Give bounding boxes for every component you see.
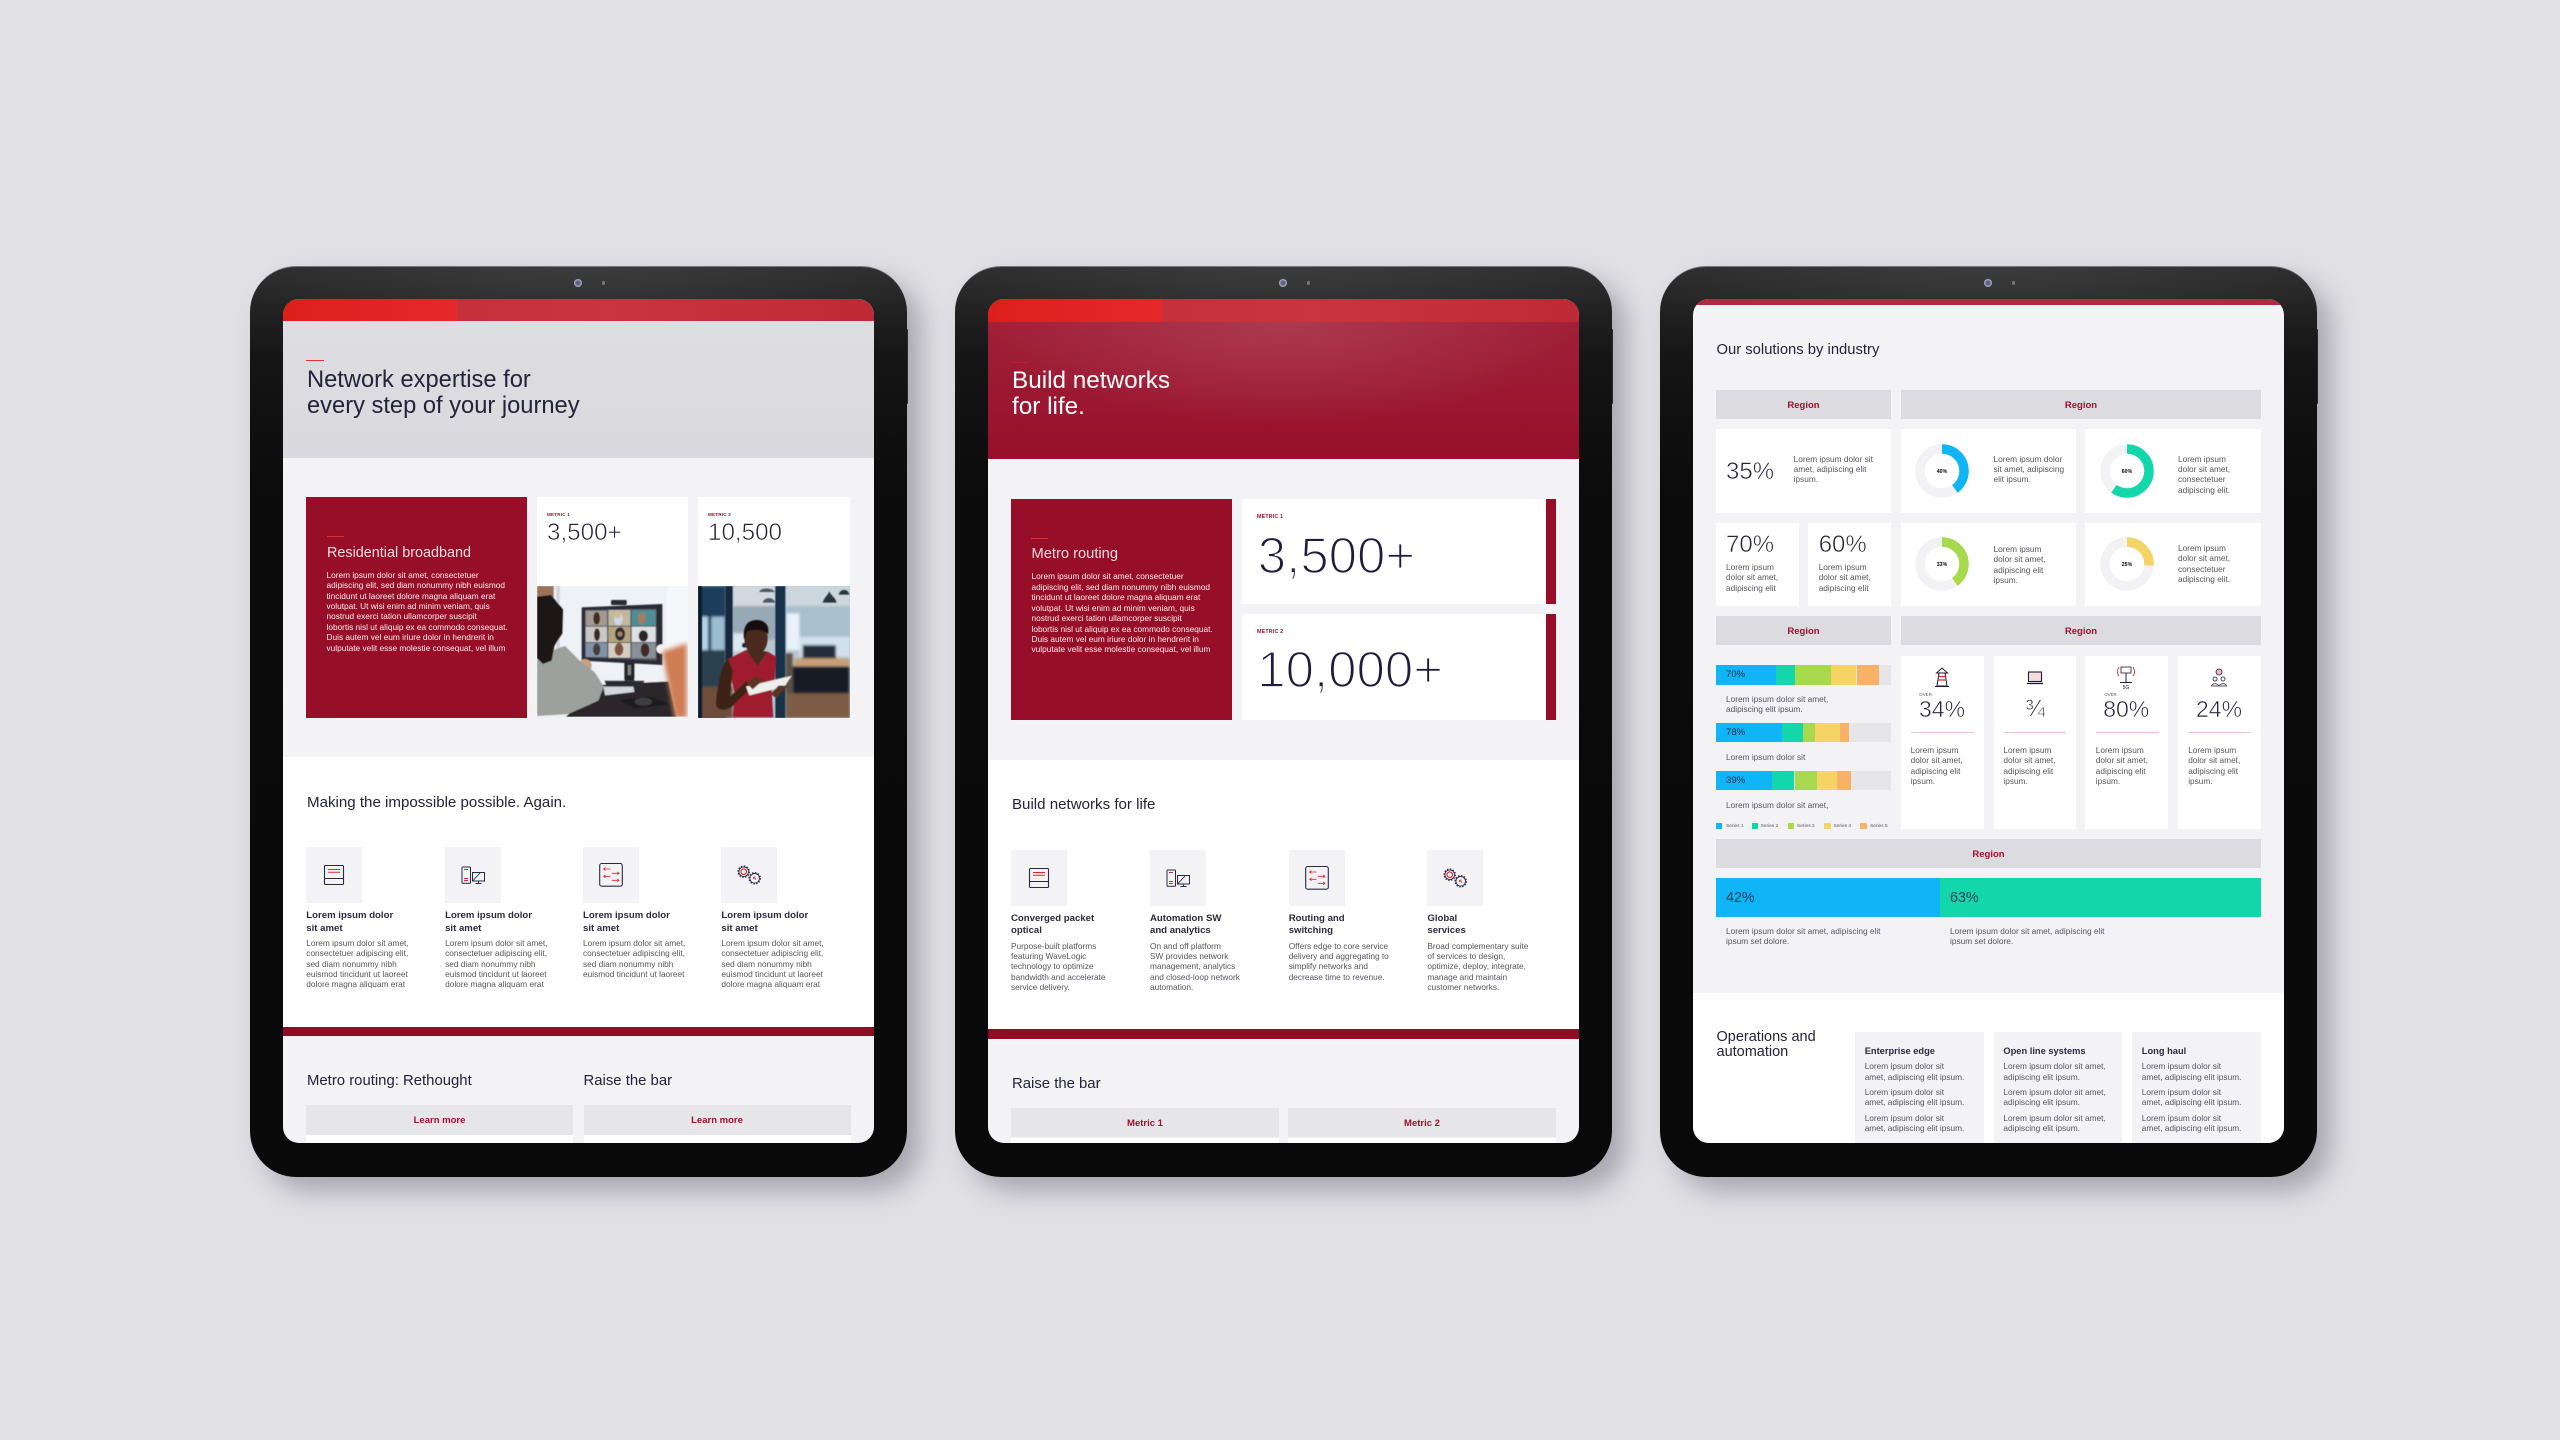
feature: routing: simplify networks and — [1289, 961, 1368, 971]
screen 1: dolore magna aliquam erat — [445, 979, 544, 989]
feature: automation: SW provides network — [1150, 951, 1228, 961]
feature: global services: services — [1427, 925, 1466, 936]
stat card 3/4: dolor sit amet, — [2003, 755, 2056, 765]
big metric 2: METRIC 2 — [1257, 629, 1283, 635]
section: making the impossible possible — [282, 757, 874, 1027]
card body: nostrud exerci tation ullamcorper suscipit — [326, 611, 477, 621]
column: open line systems: adipiscing elit ipsum. — [2003, 1097, 2080, 1107]
button: metric 1 — [1011, 1108, 1279, 1143]
button: metric 1: Metric 1 — [1127, 1118, 1163, 1129]
card body: Lorem ipsum dolor sit amet, consectetuer — [326, 570, 479, 580]
stat card 70% — [1716, 523, 1799, 606]
heading: Operations and — [1716, 1029, 1816, 1045]
stacked bar 70%: 70% — [1726, 669, 1745, 680]
feature 2: sit amet — [445, 923, 481, 934]
stat card 3/4: ¾ — [2025, 695, 2045, 722]
feature 3 — [583, 847, 685, 979]
header band — [988, 322, 1579, 459]
stat card 70%: 70% — [1726, 531, 1774, 558]
red card: residential broadband — [306, 497, 527, 718]
column: enterprise edge — [1855, 1032, 1984, 1143]
column: long haul — [2132, 1032, 2261, 1143]
column: enterprise edge: Lorem ipsum dolor sit — [1865, 1061, 1944, 1071]
feature: global services: of services to design, — [1427, 951, 1505, 961]
title: Network expertise for — [307, 367, 531, 393]
card body: Duis autem vel eum iriure dolor in hendrerit in — [326, 632, 494, 642]
stat card 3/4 — [1994, 656, 2076, 829]
top colour strip — [282, 299, 874, 321]
card body: tincidunt ut laoreet dolore magna aliquam erat — [326, 591, 495, 601]
caption 63% — [1950, 926, 2104, 946]
card body: volutpat. Ut wisi enim ad minim veniam, quis — [1031, 603, 1195, 613]
screen 1: dolore magna aliquam erat — [306, 979, 405, 989]
card body: Duis autem vel eum iriure dolor in hendrerit in — [1031, 634, 1199, 644]
metric card 1: 3,500+ — [547, 519, 622, 546]
feature 3: Lorem ipsum dolor — [583, 910, 670, 921]
heading: Our solutions by industry — [1716, 342, 1879, 358]
feature: routing — [1289, 850, 1389, 982]
stat card 34% — [1901, 656, 1984, 829]
bar caption: Lorem ipsum dolor sit — [1726, 752, 1805, 762]
feature: routing: switching — [1289, 925, 1333, 936]
donut card 60%: 60% — [2122, 469, 2133, 475]
caption 42%: Lorem ipsum dolor sit amet, adipiscing elit — [1726, 926, 1880, 936]
card body — [326, 570, 508, 653]
tablet 1: network expertise — [250, 266, 906, 1177]
screen 1: euismod tincidunt ut laoreet — [306, 969, 408, 979]
donut card 60%: adipiscing elit. — [2178, 485, 2230, 495]
metric card 1: METRIC 1 — [547, 512, 570, 517]
feature 3: sed diam nonummy nibh — [583, 959, 673, 969]
stacked bar 39% — [1716, 771, 1891, 790]
column: open line systems: adipiscing elit ipsum. — [2003, 1072, 2080, 1082]
segmented bar 42% / 63%: 42% — [1726, 890, 1755, 906]
stat card 70%: adipiscing elit — [1726, 583, 1776, 593]
bar caption: Lorem ipsum dolor sit amet, — [1726, 800, 1828, 810]
icon: 5G antenna — [2117, 666, 2135, 690]
screen 3 — [1692, 299, 2284, 1143]
stat card 24%: 24% — [2196, 696, 2242, 722]
red card: metro routing — [1011, 499, 1232, 720]
heading: metro routing rethought: Metro routing: Rethought — [307, 1073, 472, 1089]
column: open line systems: Lorem ipsum dolor sit amet, — [2003, 1087, 2106, 1097]
segmented bar 42% / 63% — [1716, 878, 2261, 917]
column: enterprise edge: amet, adipiscing elit ipsum. — [1865, 1097, 1964, 1107]
metric card 2 — [698, 497, 850, 586]
card body: vulputate velit esse molestie consequat, vel illum — [326, 643, 505, 653]
feature 4: sit amet — [721, 923, 758, 934]
feature: converged packet optical: Purpose-built platforms — [1011, 940, 1096, 950]
donut card 40% — [1901, 429, 2076, 513]
big metric 1 — [1242, 499, 1546, 604]
region header right — [1901, 390, 2261, 419]
feature 2: Lorem ipsum dolor — [445, 910, 532, 921]
title — [307, 367, 580, 419]
big metric 1: METRIC 1 — [1257, 514, 1283, 520]
feature 1: consectetuer adipiscing elit, — [306, 948, 408, 958]
feature: global services — [1427, 850, 1528, 992]
icon: devices — [445, 847, 501, 903]
metric card 1 — [537, 497, 688, 586]
stat card 24%: Lorem ipsum — [2188, 745, 2236, 755]
big metric 1: 3,500+ — [1258, 527, 1415, 584]
icon: routing — [1289, 850, 1345, 906]
screen 2: bandwidth and accelerate — [1011, 972, 1106, 982]
stat card 35% — [1716, 429, 1891, 513]
feature: routing: delivery and aggregating to — [1289, 951, 1389, 961]
region header right: Region — [2065, 400, 2097, 411]
button: learn more: Learn more — [691, 1115, 743, 1126]
stat card 34%: 34% — [1919, 696, 1965, 722]
stat card 34%: adipiscing elit — [1911, 766, 1960, 776]
donut card 25%: consectetuer — [2178, 564, 2226, 574]
feature 3: Lorem ipsum dolor sit amet, — [583, 938, 685, 948]
donut card 40%: Lorem ipsum dolor — [1994, 454, 2062, 464]
feature 1: sed diam nonummy nibh — [306, 959, 397, 969]
screen 2: automation. — [1150, 982, 1193, 992]
card heading: Metro routing — [1031, 546, 1118, 562]
donut card 40%: 40% — [1937, 469, 1948, 475]
stat card 34%: dolor sit amet, — [1911, 755, 1963, 765]
screen 1: euismod tincidunt ut laoreet — [445, 969, 547, 979]
title: every step of your journey — [307, 393, 580, 419]
donut card 33%: adipiscing elit — [1994, 565, 2043, 575]
donut card 33%: dolor sit amet, — [1994, 554, 2046, 564]
button: metric 2: Metric 2 — [1404, 1118, 1440, 1129]
feature 1: sit amet — [306, 923, 343, 934]
title — [1012, 367, 1170, 420]
icon: packet optical — [306, 847, 362, 903]
feature: routing: Routing and — [1289, 913, 1345, 924]
feature: global services: Broad complementary suite — [1427, 940, 1528, 950]
feature: automation: and analytics — [1150, 925, 1211, 936]
region header left: Region — [1787, 626, 1820, 637]
donut card 33% — [1901, 523, 2076, 606]
column: long haul: amet, adipiscing elit ipsum. — [2142, 1123, 2241, 1133]
column: long haul: Long haul — [2142, 1046, 2186, 1056]
icon: laptop — [2027, 671, 2043, 684]
button: learn more: Learn more — [414, 1115, 465, 1126]
stat card 80% — [2085, 656, 2168, 829]
bar caption — [1726, 694, 1828, 714]
feature 4: consectetuer adipiscing elit, — [721, 948, 823, 958]
stat card 60%: 60% — [1819, 531, 1867, 558]
stat card 34%: OVER — [1919, 692, 1932, 697]
donut card 60%: Lorem ipsum — [2178, 454, 2226, 464]
feature: global services: optimize, deploy, integrate, — [1427, 961, 1526, 971]
button: learn more — [584, 1105, 850, 1143]
stat card 3/4: ipsum. — [2003, 776, 2028, 786]
feature 4: Lorem ipsum dolor sit amet, — [721, 938, 824, 948]
feature 2: consectetuer adipiscing elit, — [445, 948, 547, 958]
screen 2: service delivery. — [1011, 982, 1070, 992]
feature: global services: Global — [1427, 913, 1457, 924]
stat card 3/4: Lorem ipsum — [2003, 745, 2051, 755]
icon: devices — [1150, 850, 1206, 906]
feature: automation: Automation SW — [1150, 913, 1221, 924]
feature: converged packet optical — [1011, 850, 1106, 992]
stacked bar 78%: 78% — [1726, 727, 1745, 738]
column: long haul: Lorem ipsum dolor sit — [2142, 1087, 2221, 1097]
legend: Series 1 — [1726, 824, 1744, 828]
stat card 80%: dolor sit amet, — [2096, 755, 2148, 765]
card body: adipiscing elit, sed diam nonummy nibh euismod — [1031, 582, 1210, 592]
stat card 24%: ipsum. — [2188, 776, 2213, 786]
column: open line systems: Lorem ipsum dolor sit amet, — [2003, 1061, 2106, 1071]
stat card 24%: adipiscing elit — [2188, 766, 2238, 776]
stat card 80%: OVER — [2104, 692, 2117, 697]
card body: Lorem ipsum dolor sit amet, consectetuer — [1031, 571, 1184, 581]
region header right — [1901, 616, 2261, 645]
heading: raise the bar: Raise the bar — [1012, 1076, 1101, 1092]
stat card 35%: ipsum. — [1794, 474, 1818, 484]
stat card 70%: Lorem ipsum — [1726, 562, 1774, 572]
heading: Making the impossible possible. Again. — [307, 794, 566, 810]
feature 2: Lorem ipsum dolor sit amet, — [445, 938, 547, 948]
legend: Series 5 — [1870, 824, 1888, 828]
tablet 3: solutions by industry — [1660, 266, 2316, 1177]
feature: automation: management, analytics — [1150, 961, 1235, 971]
section: operations and automation — [1692, 993, 2284, 1143]
donut card 60% — [2085, 429, 2261, 513]
column: enterprise edge: amet, adipiscing elit ipsum. — [1865, 1072, 1964, 1082]
stat card 60%: adipiscing elit — [1819, 583, 1868, 593]
feature: converged packet optical: Converged packet — [1011, 913, 1094, 924]
big metric 2 — [1242, 614, 1546, 720]
donut card 33%: ipsum. — [1994, 575, 2018, 585]
stat card 35%: 35% — [1726, 458, 1774, 485]
metric card 2: 10,500 — [708, 519, 782, 546]
feature: converged packet optical: optical — [1011, 925, 1042, 936]
region header full — [1716, 839, 2261, 868]
feature: automation: On and off platform — [1150, 940, 1221, 950]
region header left — [1716, 390, 1891, 419]
card body: vulputate velit esse molestie consequat, vel illum — [1031, 644, 1210, 654]
caption 42%: ipsum set dolore. — [1726, 936, 1789, 946]
feature 1: Lorem ipsum dolor — [306, 910, 393, 921]
section: residential broadband — [282, 458, 874, 757]
stacked bar 70% — [1716, 665, 1891, 685]
feature 1: Lorem ipsum dolor sit amet, — [306, 938, 409, 948]
column: enterprise edge: amet, adipiscing elit ipsum. — [1865, 1123, 1964, 1133]
screen 1 — [282, 299, 874, 1143]
donut card 25%: 25% — [2122, 562, 2133, 568]
card body: volutpat. Ut wisi enim ad minim veniam, quis — [326, 601, 490, 611]
stat card 24% — [2178, 656, 2261, 829]
column: open line systems: Lorem ipsum dolor sit amet, — [2003, 1112, 2106, 1122]
stat card 80%: ipsum. — [2096, 776, 2120, 786]
legend — [1716, 823, 1888, 829]
feature 4: sed diam nonummy nibh — [721, 959, 812, 969]
feature: automation — [1150, 850, 1240, 992]
region header left: Region — [1787, 400, 1820, 411]
card body: lobortis nisl ut aliquip ex ea commodo consequat. — [326, 622, 508, 632]
heading — [1716, 1029, 1816, 1060]
column: open line systems — [1994, 1032, 2122, 1143]
screen 2: decrease time to revenue. — [1289, 972, 1385, 982]
feature: converged packet optical: featuring WaveLogic — [1011, 951, 1086, 961]
stat card 80%: 80% — [2103, 696, 2149, 722]
screen 2: customer networks. — [1427, 982, 1499, 992]
feature 2 — [445, 847, 547, 989]
metric card 2: METRIC 2 — [708, 512, 731, 517]
feature: routing: Offers edge to core service — [1289, 940, 1388, 950]
stacked bar 39%: 39% — [1726, 775, 1745, 786]
screen 1: euismod tincidunt ut laoreet — [721, 969, 823, 979]
legend: Series 4 — [1834, 824, 1851, 828]
column: open line systems: adipiscing elit ipsum. — [2003, 1123, 2080, 1133]
column: enterprise edge: Lorem ipsum dolor sit — [1865, 1112, 1944, 1122]
top strip — [1692, 299, 2284, 305]
feature 1 — [306, 847, 409, 989]
stat card 70%: dolor sit amet, — [1726, 572, 1778, 582]
icon: packet optical — [1011, 850, 1067, 906]
icon: gears — [1427, 850, 1483, 906]
title: Build networks — [1012, 367, 1170, 394]
section: build networks for life — [988, 760, 1579, 1029]
big metric 2: 10,000+ — [1257, 641, 1443, 698]
feature 4: Lorem ipsum dolor — [721, 910, 808, 921]
column: open line systems: Open line systems — [2003, 1046, 2086, 1056]
stat card 34%: ipsum. — [1911, 776, 1935, 786]
feature 4 — [721, 847, 824, 989]
donut card 40%: elit ipsum. — [1994, 474, 2031, 484]
stat card 35%: amet, adipiscing elit — [1794, 464, 1866, 474]
caption 63%: ipsum set dolore. — [1950, 936, 2013, 946]
card body: lobortis nisl ut aliquip ex ea commodo consequat. — [1031, 624, 1213, 634]
button: learn more — [306, 1105, 573, 1143]
segmented bar 42% / 63%: 63% — [1950, 890, 1979, 906]
icon: tower — [1935, 668, 1949, 687]
donut card 25%: dolor sit amet, — [2178, 553, 2230, 563]
header band — [282, 321, 874, 458]
legend: Series 2 — [1761, 824, 1778, 828]
stat card 60% — [1808, 523, 1891, 606]
card body: nostrud exerci tation ullamcorper suscipit — [1031, 613, 1182, 623]
card body — [1031, 571, 1213, 654]
legend: Series 3 — [1797, 824, 1815, 828]
screen 2: manage and maintain — [1427, 972, 1507, 982]
screen 1: euismod tincidunt ut laoreet — [583, 969, 684, 979]
donut card 60%: consectetuer — [2178, 474, 2226, 484]
photo: woman with tablet — [698, 586, 850, 718]
caption 42% — [1726, 926, 1880, 946]
feature 2: sed diam nonummy nibh — [445, 959, 536, 969]
column: long haul: Lorem ipsum dolor sit — [2142, 1112, 2221, 1122]
donut card 40%: sit amet, adipiscing — [1994, 464, 2064, 474]
icon: routing — [583, 847, 639, 903]
caption 63%: Lorem ipsum dolor sit amet, adipiscing elit — [1950, 926, 2104, 936]
donut card 25%: Lorem ipsum — [2178, 543, 2226, 553]
region header full: Region — [1972, 849, 2005, 860]
bar caption: adipiscing elit ipsum. — [1726, 704, 1803, 714]
photo: video conference — [537, 586, 688, 717]
donut card 33%: 33% — [1937, 562, 1948, 568]
icon: people — [2211, 668, 2227, 686]
stat card 34%: Lorem ipsum — [1911, 745, 1959, 755]
tablet 2: build networks — [955, 266, 1612, 1177]
screen 2 — [988, 299, 1579, 1143]
column: enterprise edge: Lorem ipsum dolor sit — [1865, 1087, 1944, 1097]
heading: Build networks for life — [1012, 796, 1155, 813]
stat card 80%: adipiscing elit — [2096, 766, 2146, 776]
top colour strip — [988, 299, 1579, 322]
feature 3: consectetuer adipiscing elit, — [583, 948, 685, 958]
column: long haul: Lorem ipsum dolor sit — [2142, 1061, 2221, 1071]
stat card 80%: Lorem ipsum — [2096, 745, 2144, 755]
card body: adipiscing elit, sed diam nonummy nibh euismod — [326, 580, 505, 590]
screen 1: dolore magna aliquam erat — [721, 979, 820, 989]
stat card 35%: Lorem ipsum dolor sit — [1794, 454, 1873, 464]
donut card 60%: dolor sit amet, — [2178, 464, 2230, 474]
stacked bar 78% — [1716, 723, 1891, 742]
stat card 24%: dolor sit amet, — [2188, 755, 2240, 765]
icon: gears — [721, 847, 777, 903]
heading: raise the bar: Raise the bar — [584, 1073, 672, 1089]
region header right: Region — [2065, 626, 2097, 637]
card heading: Residential broadband — [327, 545, 471, 561]
stat card 60%: dolor sit amet, — [1819, 572, 1871, 582]
stat card 60%: Lorem ipsum — [1819, 562, 1867, 572]
screen 2: and closed-loop network — [1150, 972, 1240, 982]
column: long haul: amet, adipiscing elit ipsum. — [2142, 1097, 2241, 1107]
heading: automation — [1716, 1044, 1788, 1060]
stat card 3/4: adipiscing elit — [2003, 766, 2053, 776]
card body: tincidunt ut laoreet dolore magna aliquam erat — [1031, 592, 1200, 602]
region header left — [1716, 616, 1891, 645]
feature: converged packet optical: technology to optimize — [1011, 961, 1094, 971]
title: for life. — [1012, 393, 1085, 420]
donut card 25%: adipiscing elit. — [2178, 574, 2230, 584]
feature 3: sit amet — [583, 923, 619, 934]
column: long haul: amet, adipiscing elit ipsum. — [2142, 1072, 2241, 1082]
donut card 33%: Lorem ipsum — [1994, 544, 2041, 554]
bar caption: Lorem ipsum dolor sit amet, — [1726, 694, 1828, 704]
donut card 25% — [2085, 523, 2261, 606]
button: metric 2 — [1288, 1108, 1556, 1143]
column: enterprise edge: Enterprise edge — [1865, 1046, 1935, 1056]
